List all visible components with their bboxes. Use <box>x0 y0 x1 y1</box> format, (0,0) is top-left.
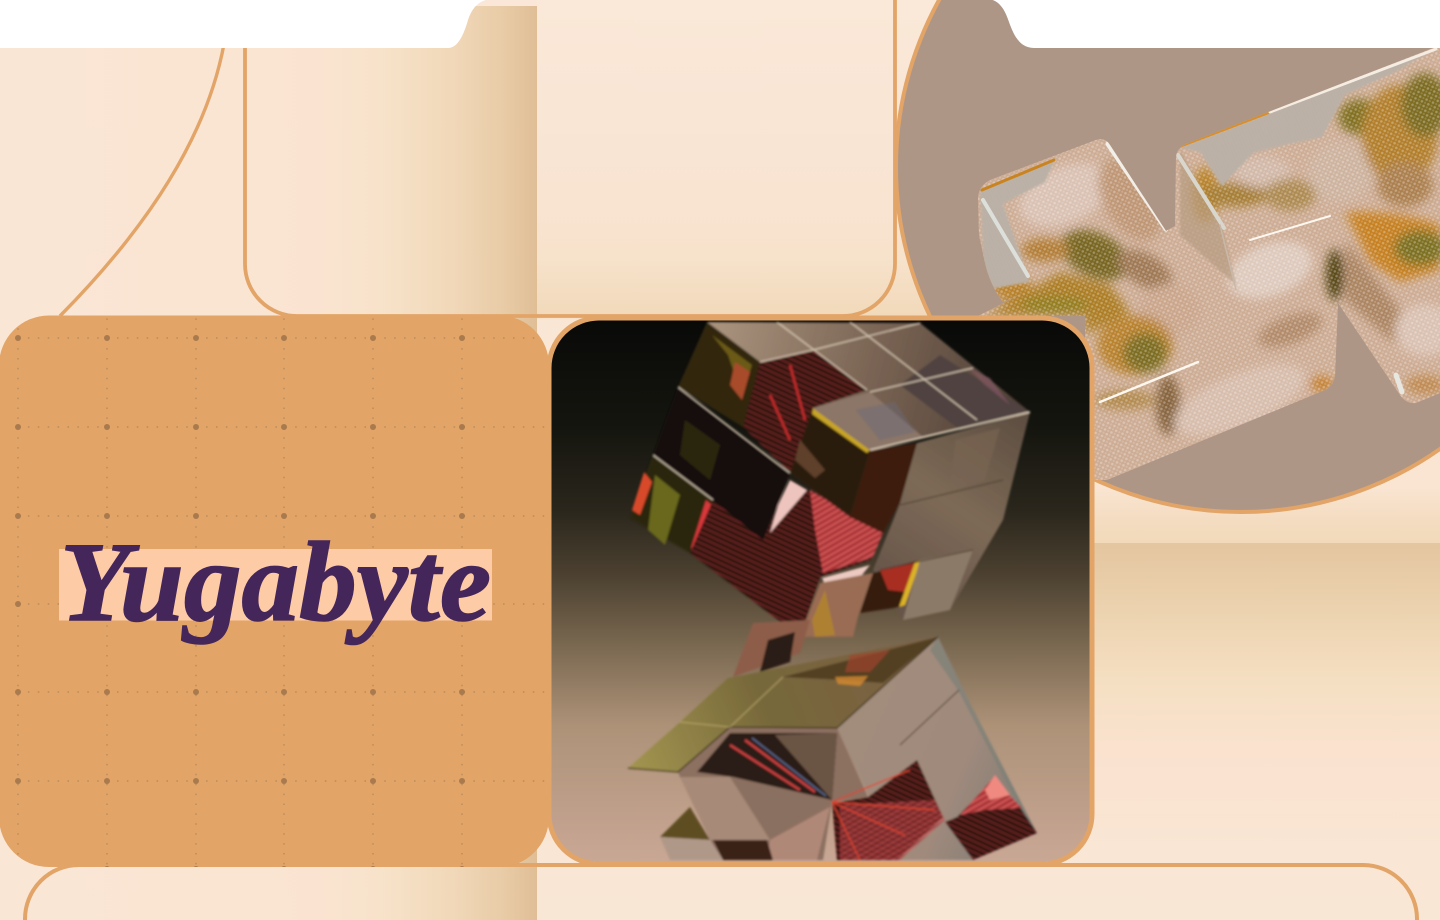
coloured pellet patches <box>985 73 1440 450</box>
logo highlight <box>59 549 492 620</box>
pellet texture <box>970 40 1440 485</box>
brand panel <box>0 316 549 872</box>
white top band <box>0 0 1440 48</box>
glass W shape image <box>970 40 1440 485</box>
lower cube <box>628 620 1037 860</box>
photo frame <box>549 318 1092 864</box>
curved outline left <box>60 44 224 316</box>
rounded outline card bottom <box>25 865 1417 920</box>
upper cube <box>630 322 1030 637</box>
glass highlights <box>982 49 1436 402</box>
rounded outline card top <box>245 0 895 316</box>
circle backdrop <box>896 0 1440 512</box>
dot grid <box>15 318 549 872</box>
logo wordmark: Yugabyte <box>60 520 491 645</box>
glass back panels <box>980 48 1436 290</box>
glass cubes photo <box>549 318 1092 864</box>
